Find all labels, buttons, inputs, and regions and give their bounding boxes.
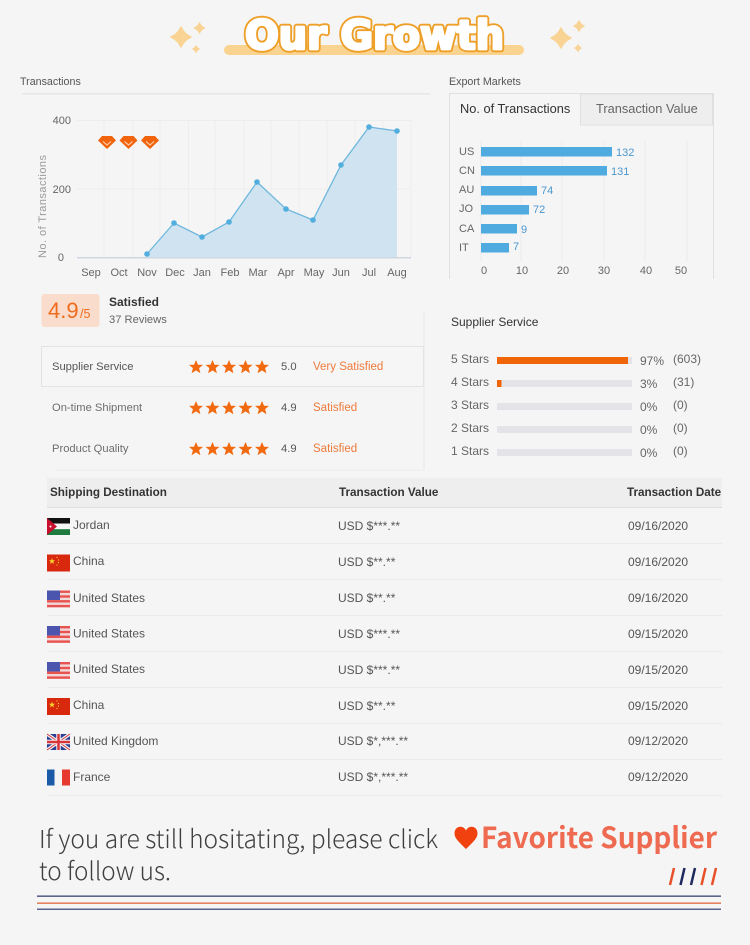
y axis labels: 200 — [53, 184, 71, 196]
x axis labels: Apr — [277, 267, 295, 279]
row: 4 Stars — [451, 375, 694, 391]
row: Supplier Service: 5.0 — [281, 361, 297, 373]
row: 5 Stars: 5 Stars — [451, 352, 489, 366]
heading: Supplier Service: Supplier Service — [451, 315, 539, 329]
x axis labels: May — [304, 267, 325, 279]
row: Product Quality: Product Quality — [52, 443, 129, 455]
chart line — [147, 127, 397, 254]
row: On-time Shipment — [52, 401, 357, 414]
y axis title: No. of Transactions — [37, 154, 49, 258]
row: 3 Stars: (0) — [673, 398, 688, 412]
heading: Export Markets: Export Markets — [449, 76, 521, 88]
country labels: IT — [459, 242, 469, 254]
row: Jordan: USD $***.** — [338, 519, 400, 533]
table header: Transaction Value — [339, 486, 439, 499]
call to action text — [39, 820, 438, 888]
row: 5 Stars — [451, 352, 701, 368]
x axis values: 0 — [481, 265, 487, 277]
data points — [144, 124, 400, 257]
row: China: USD $**.** — [338, 555, 396, 569]
country labels — [459, 146, 475, 254]
x axis labels: Dec — [165, 267, 185, 279]
score badge — [42, 294, 100, 327]
panel: rating summary — [42, 294, 167, 327]
row: United Kingdom: 09/12/2020 — [628, 734, 688, 748]
chart area fill — [147, 127, 397, 258]
bar values: 132 — [616, 147, 634, 159]
bar values: 72 — [533, 204, 545, 216]
favorite supplier link: Favorite Supplier — [481, 815, 717, 857]
table header — [47, 478, 722, 508]
row: France: 09/12/2020 — [628, 770, 688, 784]
row: 2 Stars: 2 Stars — [451, 421, 489, 435]
row: United States — [47, 662, 688, 679]
x axis labels: Jan — [193, 267, 211, 279]
row: Product Quality: 4.9 — [281, 443, 297, 455]
table header: Transaction Date — [627, 486, 722, 499]
row: Jordan: Jordan — [73, 518, 110, 532]
row: China: USD $**.** — [338, 699, 396, 713]
row: United States: 09/15/2020 — [628, 627, 688, 641]
x axis labels: Sep — [81, 267, 101, 279]
title: Our Growth: Our Growth — [245, 13, 504, 59]
row: China — [47, 554, 688, 572]
y axis labels: 400 — [53, 115, 71, 127]
icon: right sparkles — [551, 20, 584, 52]
row: United States: USD $***.** — [338, 627, 400, 641]
row: 1 Stars: 0% — [640, 446, 658, 460]
row: France — [47, 770, 688, 786]
bar values — [513, 147, 634, 253]
row: Jordan: 09/16/2020 — [628, 519, 688, 533]
x axis labels: Aug — [387, 267, 407, 279]
row: United States: USD $**.** — [338, 591, 396, 605]
x axis values: 10 — [516, 265, 528, 277]
title: Our Growth: Our Growth — [245, 13, 504, 59]
review count: 37 Reviews — [109, 314, 167, 326]
x axis values: 50 — [675, 265, 687, 277]
country labels: US — [459, 146, 474, 158]
y axis labels — [53, 115, 71, 264]
heading: Transactions: Transactions — [20, 76, 81, 88]
row: 4 Stars: 4 Stars — [451, 375, 489, 389]
row: United States: 09/15/2020 — [628, 663, 688, 677]
row: On-time Shipment: Satisfied — [313, 402, 357, 414]
x axis values: 40 — [640, 265, 652, 277]
row: 3 Stars: 0% — [640, 400, 658, 414]
row: China — [47, 698, 688, 715]
score badge: /5 — [80, 307, 90, 321]
rating label: Satisfied — [109, 295, 159, 309]
footer rules — [37, 896, 721, 910]
row: Jordan — [47, 518, 688, 535]
tab: No. of Transactions: No. of Transactions — [460, 101, 570, 116]
row: China: China — [73, 554, 105, 568]
row: United States — [47, 626, 688, 643]
row: United States: United States — [73, 591, 145, 605]
row: United Kingdom: USD $*,***.** — [338, 734, 408, 748]
row: China: China — [73, 698, 105, 712]
x axis values — [481, 265, 687, 277]
tab: Transaction Value — [580, 94, 712, 125]
row: France: USD $*,***.** — [338, 770, 408, 784]
row: United Kingdom: United Kingdom — [73, 734, 158, 748]
row: 3 Stars — [451, 398, 688, 414]
row: United States: United States — [73, 626, 145, 640]
row: United States: 09/16/2020 — [628, 591, 688, 605]
row: United Kingdom — [47, 734, 688, 750]
call to action text: to follow us. — [39, 852, 171, 888]
row: Supplier Service: Supplier Service — [52, 361, 133, 373]
x axis labels: Jun — [332, 267, 350, 279]
row: United States — [47, 590, 688, 608]
bar values: 7 — [513, 241, 519, 253]
row: 5 Stars: (603) — [673, 352, 701, 366]
panel: rating rows — [42, 312, 424, 470]
icon: heart — [454, 827, 478, 849]
country labels: JO — [459, 203, 474, 215]
row: Product Quality — [52, 442, 357, 455]
x axis values: 20 — [557, 265, 569, 277]
x axis labels: Feb — [221, 267, 239, 279]
row: France: France — [73, 770, 111, 784]
row: 1 Stars: (0) — [673, 444, 688, 458]
country labels: CN — [459, 165, 475, 177]
row: Supplier Service — [52, 360, 383, 373]
row: 2 Stars: 0% — [640, 423, 658, 437]
row: 5 Stars: 97% — [640, 354, 664, 368]
country labels: AU — [459, 184, 474, 196]
row: Product Quality: Satisfied — [313, 443, 357, 455]
score badge: 4.9 — [48, 298, 79, 323]
icon: gold supplier diamonds — [98, 136, 159, 149]
table header: Shipping Destination — [50, 486, 167, 499]
row: Supplier Service: Very Satisfied — [313, 361, 383, 373]
row: United States: United States — [73, 662, 145, 676]
row: 4 Stars: 3% — [640, 377, 658, 391]
x axis values: 30 — [598, 265, 610, 277]
row: 2 Stars: (0) — [673, 421, 688, 435]
row: On-time Shipment: 4.9 — [281, 402, 297, 414]
panel: supplier service breakdown — [451, 315, 701, 460]
row: China: 09/16/2020 — [628, 555, 688, 569]
row: 4 Stars: (31) — [673, 375, 694, 389]
panel: export markets — [449, 76, 714, 279]
bar values: 74 — [541, 185, 553, 197]
row: 1 Stars: 1 Stars — [451, 444, 489, 458]
call to action text: If you are still hositating, please click — [39, 820, 438, 856]
x axis labels: Jul — [362, 267, 376, 279]
row: China: 09/15/2020 — [628, 699, 688, 713]
bar chart: markets — [481, 147, 612, 252]
row: 3 Stars: 3 Stars — [451, 398, 489, 412]
panel: transactions line chart — [20, 76, 430, 279]
y axis labels: 0 — [58, 252, 64, 264]
x axis labels: Oct — [110, 267, 128, 279]
tab: Transaction Value: Transaction Value — [596, 101, 698, 116]
bar values: 9 — [521, 224, 527, 236]
row: On-time Shipment: On-time Shipment — [52, 402, 143, 414]
icon: left sparkles — [171, 22, 205, 53]
row: 1 Stars — [451, 444, 688, 460]
x axis labels: Nov — [137, 267, 157, 279]
country labels: CA — [459, 223, 475, 235]
icon: slashes — [670, 868, 716, 885]
bar values: 131 — [611, 166, 629, 178]
row: 2 Stars — [451, 421, 688, 437]
table: shipping destinations — [47, 478, 722, 796]
x axis labels — [81, 267, 407, 279]
x axis labels: Mar — [249, 267, 268, 279]
row: United States: USD $***.** — [338, 663, 400, 677]
